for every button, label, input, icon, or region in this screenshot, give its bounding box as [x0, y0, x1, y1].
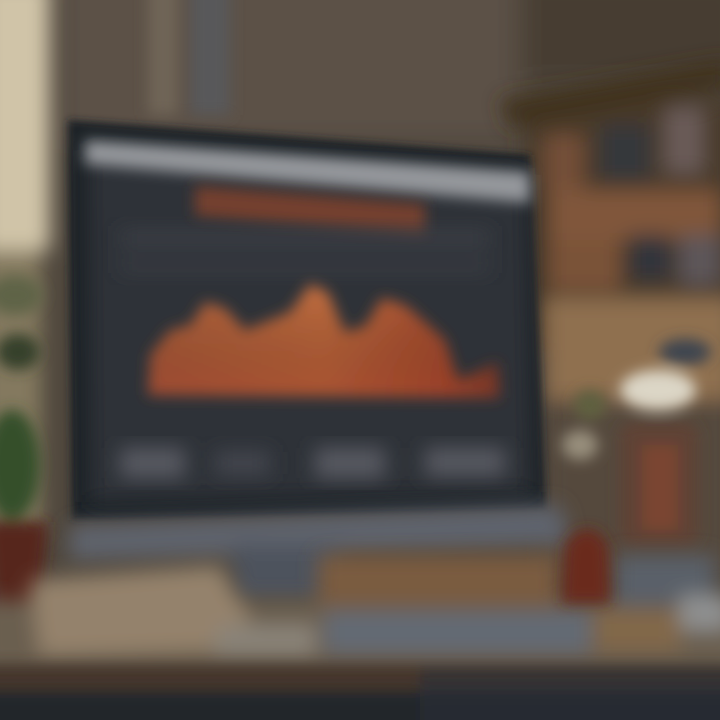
monitor [68, 120, 546, 520]
chart labels [120, 448, 505, 478]
desk front edge [0, 666, 720, 720]
area chart [148, 284, 500, 398]
faint subheading lines [120, 232, 490, 270]
browser title bar [85, 140, 530, 203]
window on left [0, 0, 50, 530]
red bottle [562, 530, 610, 603]
wall stripes [148, 0, 230, 115]
shelves on right [500, 60, 720, 580]
monitor screen [88, 150, 532, 502]
desk lamp [562, 339, 711, 547]
plant on left [0, 275, 48, 620]
monitor bezel [68, 120, 546, 520]
monitor base [70, 505, 570, 600]
desk items [0, 555, 720, 670]
screen heading [195, 186, 425, 234]
